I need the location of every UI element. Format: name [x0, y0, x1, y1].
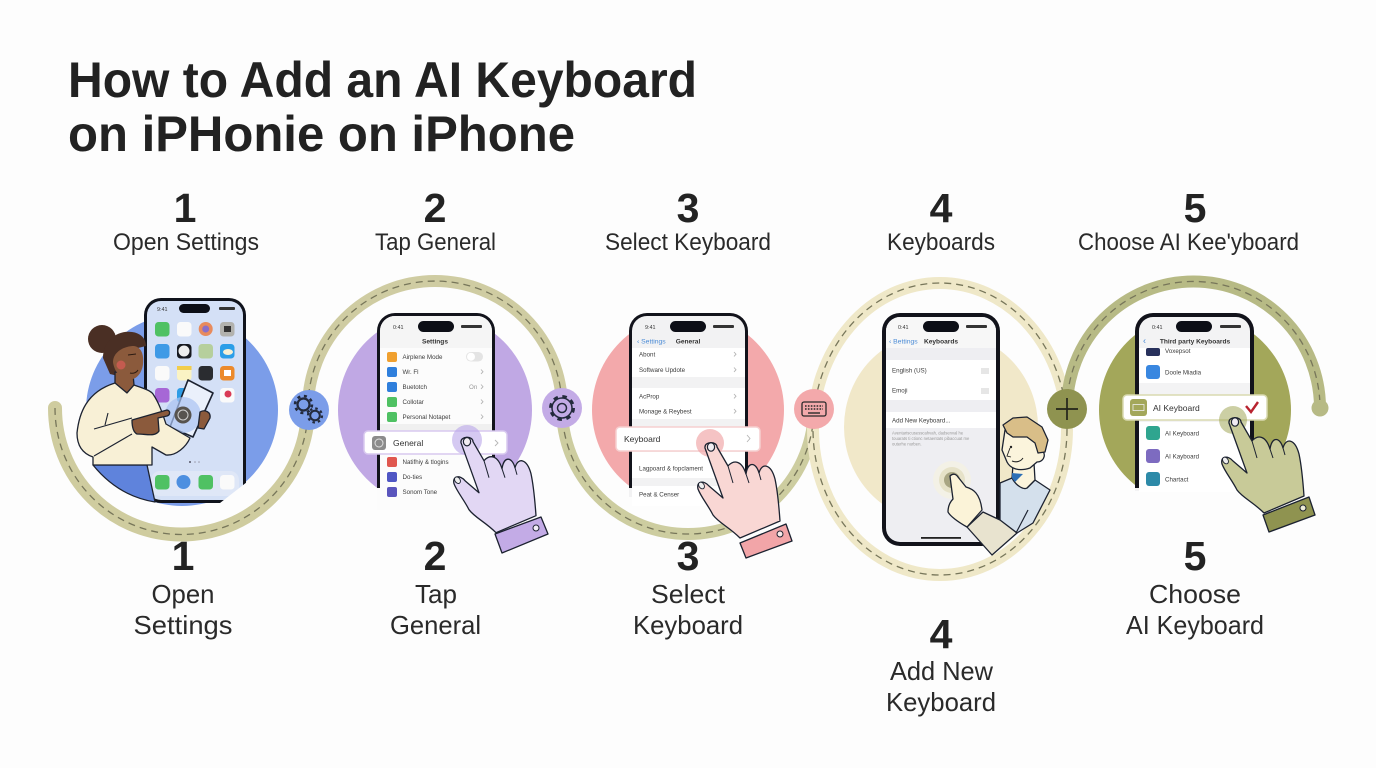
bottom step labels: Settings [134, 610, 232, 640]
phone 3 screen: Abont [639, 352, 655, 358]
bottom step labels: Open [152, 579, 214, 609]
bottom step labels: Keyboard [633, 610, 743, 640]
top step labels: Select Keyboard [605, 229, 771, 256]
title: on iPHonie on iPhone [68, 106, 575, 162]
phone 3 screen: Software Updote [639, 367, 686, 374]
title: How to Add an AI Keyboard [68, 52, 697, 108]
top step labels: 2 [424, 185, 446, 231]
phone 5 screen: AI Kayboard [1165, 454, 1200, 460]
phone 2 screen [377, 316, 502, 510]
step 3 illustration: general phone [615, 313, 761, 506]
phone 4 [882, 313, 1000, 546]
phone 5 screen: Third party Keyboards [1160, 338, 1231, 346]
phone 4: Add New Keyboard... [892, 418, 951, 424]
phone 3 screen: 9:41 [645, 325, 656, 331]
step colour circles [86, 313, 1291, 521]
phone 2 screen: 0:41 [393, 325, 404, 331]
top step labels [113, 185, 1299, 256]
hand pointer and sleeve [948, 474, 1028, 555]
card: AI Keyboard: AI Keyboard [1153, 403, 1200, 413]
held phone [165, 380, 213, 437]
phone 2 frame [377, 313, 495, 488]
card: AI Keyboard [1123, 395, 1267, 420]
phone 4: Keyboards [924, 338, 958, 346]
step 2 illustration: settings phone [363, 313, 508, 507]
phone 5 frame [1135, 313, 1254, 488]
connector icon: plus [1047, 389, 1087, 429]
phone 5 screen: 0:41 [1152, 325, 1162, 331]
phone 2 screen: Natifhiy & tlogins [402, 459, 449, 466]
phone 3 screen: Peat & Censer [639, 492, 679, 498]
step 4 illustration: keyboards phone and man [882, 313, 1050, 555]
phone 4: Aventariscusesscahvah, dadsenval he [892, 430, 964, 436]
top step labels: 3 [677, 185, 699, 231]
top step labels: Choose AI Kee'yboard [1078, 229, 1299, 256]
card: Keyboard [616, 427, 760, 451]
step 1 illustration: phone and woman [77, 298, 250, 506]
top step labels: 1 [174, 185, 196, 231]
phone 4: ‹ Bettings [889, 338, 918, 346]
winding dashed track [55, 281, 1328, 575]
phone 3 frame [629, 313, 748, 488]
top step labels: 5 [1184, 185, 1206, 231]
phone 2 screen: Airplene Mode [402, 354, 443, 361]
phone 2 screen: Do-ties [402, 474, 422, 481]
phone 3 screen: Lagpoard & fopclament [639, 466, 703, 472]
phone 4: 0:41 [898, 325, 908, 331]
bottom step labels: General [390, 610, 481, 640]
connector icon: gears [289, 390, 329, 430]
phone 1 [144, 298, 250, 506]
phone 2 screen: Collotar [402, 399, 424, 406]
hand pointer: General [452, 425, 548, 553]
bottom step labels [134, 533, 1264, 717]
phone 3 screen: AcProp [639, 394, 660, 400]
card: General: General [393, 438, 423, 448]
phone 3 screen: ‹ Settings [637, 338, 666, 346]
check mark [1246, 402, 1258, 412]
top step labels: Tap General [375, 229, 496, 256]
bottom step labels: 3 [677, 533, 699, 579]
phone 4: English (US) [892, 368, 927, 374]
phone 1: 9:41 [157, 307, 168, 313]
card: Keyboard: Keyboard [624, 434, 661, 444]
step 5 illustration: third party keyboards phone [1122, 313, 1268, 506]
bottom step labels: 4 [930, 611, 953, 657]
bottom step labels: 5 [1184, 533, 1206, 579]
man [1000, 417, 1050, 533]
top step labels: Open Settings [113, 229, 259, 256]
hand pointer: AI Keyboard [1219, 406, 1315, 532]
connector icon: gear [542, 388, 582, 428]
phone 3 screen: Monage & Reybest [639, 408, 692, 416]
bottom step labels: Choose [1149, 579, 1241, 609]
phone 3 screen [629, 316, 755, 510]
connector icon: keyboard [794, 389, 834, 429]
bottom step labels: AI Keyboard [1126, 610, 1264, 640]
phone 5 screen: ‹ [1143, 336, 1146, 346]
bottom step labels: Keyboard [886, 687, 996, 717]
phone 2 screen: Sonom Tone [402, 489, 438, 496]
phone 5 screen: Doole Miadia [1165, 370, 1202, 376]
phone 2 screen: Settings [422, 338, 448, 346]
bottom step labels: Select [651, 579, 726, 609]
title [68, 52, 697, 162]
phone 5 screen: Voxepsot [1165, 348, 1191, 355]
phone 2 screen: Buetotch [402, 384, 427, 391]
phone 5 screen: Chartact [1165, 476, 1189, 484]
phone 2 screen: Personal Notapet [402, 414, 451, 421]
phone 2 screen: Wr. Fl [402, 369, 419, 376]
bottom step labels: Tap [415, 579, 457, 609]
card: General [364, 431, 507, 454]
bottom step labels: 1 [172, 533, 194, 579]
phone 4: outerhe nurben. [892, 442, 922, 446]
bottom step labels: Add New [890, 656, 993, 686]
woman [77, 325, 210, 502]
phone 2 screen: On [469, 384, 478, 391]
phone 5 screen [1135, 317, 1260, 510]
top step labels: Keyboards [887, 229, 995, 256]
phone 5 screen: AI Keyboard [1165, 430, 1200, 438]
phone 3 screen: General [676, 338, 700, 346]
bottom step labels: 2 [424, 533, 446, 579]
phone 4: touarats ti ctionc netaentats pibaccuat me [892, 436, 970, 441]
hand pointer: Keyboard [696, 429, 792, 558]
phone 4: Emoji [892, 388, 907, 394]
top step labels: 4 [930, 185, 953, 231]
